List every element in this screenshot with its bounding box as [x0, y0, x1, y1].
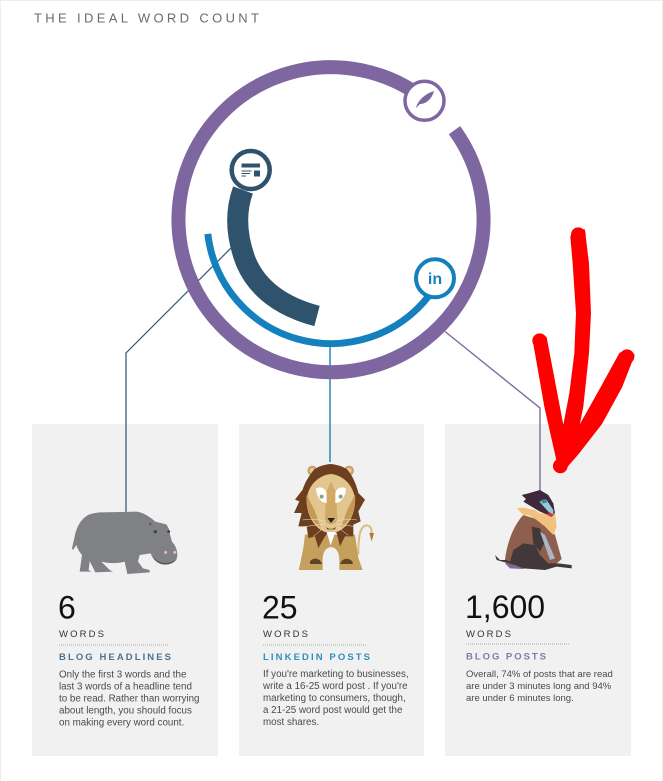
heading: BLOG POSTS — [466, 652, 546, 662]
lion face — [307, 474, 355, 533]
purple ring chart — [178, 67, 483, 372]
panel text: linkedin posts — [262, 590, 409, 728]
icon: mandrill — [495, 490, 572, 570]
icon: lion — [294, 464, 374, 570]
panel text: blog headlines — [58, 590, 200, 728]
body: are under 3 minutes long and 94% — [466, 681, 612, 692]
panel: linkedin posts — [239, 424, 424, 756]
lion mane — [294, 464, 365, 548]
body: If you're marketing to businesses, — [263, 669, 409, 680]
panel text: blog posts — [465, 589, 613, 704]
panel text: blog posts: WORDS — [466, 629, 511, 640]
icon: headline — [232, 151, 270, 189]
lion tail — [358, 525, 372, 555]
lion body — [299, 535, 363, 570]
icon: hippo — [72, 512, 177, 574]
body: most shares. — [263, 717, 319, 728]
body: Only the first 3 words and the — [59, 670, 187, 680]
blue arc — [208, 234, 454, 344]
panel text: linkedin posts: WORDS — [263, 629, 308, 640]
icon: feather — [405, 81, 444, 120]
heading: LINKEDIN POSTS — [263, 652, 370, 663]
red arrow annotation — [533, 228, 634, 473]
dark blue arc — [232, 151, 317, 316]
icon: linkedin — [416, 259, 454, 297]
body: about length, you should focus — [59, 706, 192, 716]
panel text: blog headlines: WORDS — [59, 629, 104, 640]
body: to be read. Rather than worrying — [59, 694, 200, 704]
connector: blog posts — [445, 332, 540, 491]
count: 1,600 — [465, 589, 545, 625]
title: THE IDEAL WORD COUNT — [34, 10, 259, 26]
connector: headlines — [126, 246, 232, 512]
body: marketing to consumers, though, — [263, 693, 406, 704]
icon: linkedin: in — [428, 271, 442, 288]
body: write a 16-25 word post . If you're — [262, 681, 408, 692]
count: 6 — [58, 590, 76, 626]
body: are under 6 minutes long. — [466, 693, 574, 704]
body: on making every word count. — [59, 718, 184, 728]
heading: BLOG HEADLINES — [59, 652, 171, 663]
body: a 21-25 word post would get the — [263, 705, 403, 716]
count: 25 — [262, 590, 298, 626]
connector: linkedin — [329, 345, 331, 462]
body: last 3 words of a headline tend — [59, 682, 192, 692]
body: Overall, 74% of posts that are read — [466, 669, 613, 680]
panel: blog headlines — [32, 424, 218, 756]
panel: blog posts — [445, 424, 631, 756]
lion whiskers — [303, 519, 357, 536]
